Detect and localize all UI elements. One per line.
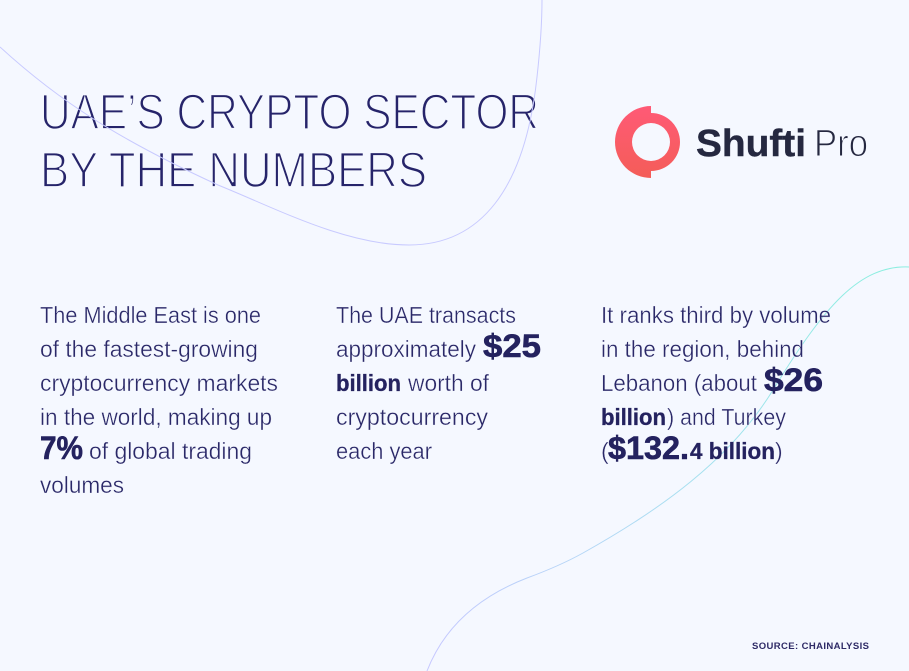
title: BY THE NUMBERS <box>40 142 427 198</box>
text block: column 3: 4 billion <box>690 438 775 464</box>
text block: column 3: in the region, behind <box>601 336 804 362</box>
text block: column 2: each year <box>336 438 432 464</box>
text block: column 3 <box>601 302 831 466</box>
text block: column 3: billion <box>601 404 666 430</box>
text block: column 3: ) <box>775 438 783 464</box>
source note: SOURCE: CHAINALYSIS <box>752 641 869 652</box>
text block: column 3: It ranks third by volume <box>601 302 831 328</box>
text block: column 1: in the world, making up <box>40 404 272 430</box>
title <box>40 84 539 198</box>
logo wordmark <box>696 123 868 165</box>
text block: column 3: Lebanon (about <box>601 370 758 396</box>
text block: column 3: ( <box>601 438 609 464</box>
text block: column 1: volumes <box>40 472 124 498</box>
text block: column 1: of the fastest-growing <box>40 336 258 362</box>
text block: column 2: cryptocurrency <box>336 404 489 430</box>
logo: Shufti Pro <box>615 106 868 178</box>
text block: column 2: billion <box>336 370 401 396</box>
text block: column 2: worth of <box>407 370 490 396</box>
decorative curve: top <box>0 0 542 245</box>
text block: column 2: $25 <box>483 328 541 364</box>
title: UAE’S CRYPTO SECTOR <box>40 84 539 140</box>
text block: column 1 <box>40 302 278 498</box>
text block: column 1: The Middle East is one <box>40 302 261 328</box>
icon: ring <box>615 106 680 178</box>
text block: column 3: ) and Turkey <box>667 404 786 430</box>
text block: column 2: The UAE transacts <box>336 302 516 328</box>
text block: column 3: $26 <box>764 362 823 398</box>
logo wordmark: Shufti <box>696 123 806 165</box>
text block: column 3: $132. <box>608 430 689 466</box>
text block: column 2: approximately <box>336 336 476 362</box>
text block: column 1: 7% <box>40 430 83 466</box>
decorative curve: bottom right <box>427 267 909 671</box>
text block: column 2 <box>336 302 541 464</box>
text block: column 1: of global trading <box>89 438 252 464</box>
logo wordmark: Pro <box>814 123 868 165</box>
text block: column 1: cryptocurrency markets <box>40 370 278 396</box>
